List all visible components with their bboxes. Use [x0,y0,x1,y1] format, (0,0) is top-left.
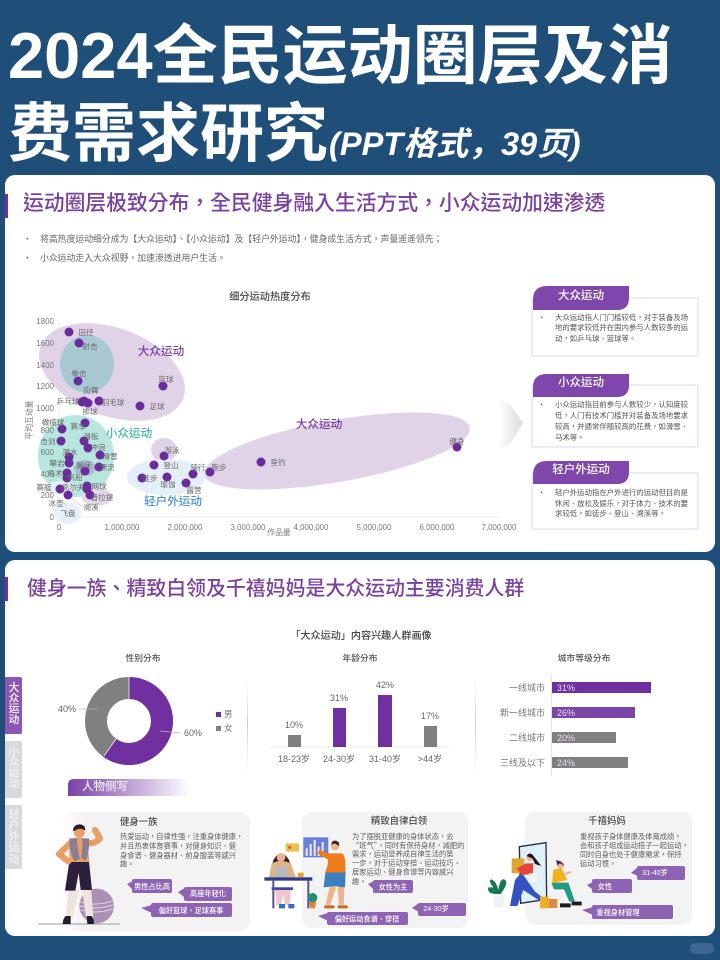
tag [587,879,632,893]
tag: 偏好篮球、足球赛事 [159,906,223,916]
side tab: mass sports: 众 [9,690,20,706]
side tab: light outdoor: 轻 [9,807,20,822]
scatter chart: 平均互动量 [24,400,35,439]
scatter chart: 5,000,000 [357,523,392,532]
side tab: niche sports: 运 [9,765,20,780]
persona card: white collar: 为了摆脱亚健康的身体状态，去 [352,832,454,842]
persona card: millennial moms: 会和孩子组成运动搭子一起运动， [580,841,689,851]
bar chart: city tier: 26% [557,708,575,718]
tag [631,866,685,880]
scatter chart: 瑜伽 [160,479,176,490]
bar chart: age [270,651,453,764]
persona card: white collar [264,812,468,928]
scatter chart: 作品量 [267,527,291,538]
tag [368,880,413,893]
donut chart: gender: 男 [224,708,233,720]
definition card: niche sports [532,374,698,447]
tag: 男性占比高 [134,882,170,892]
definition card: light outdoor: • [538,487,545,498]
side tab: niche sports: 动 [9,776,20,791]
scatter chart: 乒乓球 [57,396,80,407]
scatter chart: 6,000,000 [420,523,455,532]
heading: 健身一族、精致白领及千禧妈妈是大众运动主要消费人群 [27,572,524,601]
bar chart: age: 31% [330,693,348,703]
scatter chart: 1000 [36,404,55,413]
definition card: mass sports: 大众运动指人门门槛较低，对于装备及场 [555,312,688,323]
bar chart: city tier: 31% [557,683,575,693]
scatter chart: 排球 [82,406,98,417]
bar chart: age: >44岁 [418,753,442,764]
scatter chart: 射击 [82,341,98,352]
tag: 女性 [598,882,612,892]
bar chart: city tier: 三线及以下 [500,756,545,769]
bullet text block [23,232,442,264]
tag: 女性为主 [379,882,407,892]
persona card: fitness group: 并且热衷体育赛事，对健身知识、健 [120,842,236,852]
icon: mother and shopping [488,843,582,908]
scatter chart: 田径 [78,327,94,338]
definition card: niche sports: 低，人门有技术门槛并对装备及场地要求 [555,410,689,421]
scatter chart: 普拉提 [91,492,114,503]
scatter chart: 跑步 [211,462,227,473]
section tab: persona [68,778,190,796]
scatter chart: 7,000,000 [482,523,517,532]
bar chart: age: 24-30岁 [323,753,355,764]
side tab: mass sports: 运 [9,701,20,716]
scatter chart: 滑板 [83,431,99,442]
panel: sport circle distribution [5,175,715,552]
definition card: mass sports: • [538,312,545,323]
scatter chart: 2,000,000 [168,523,203,532]
scatter chart: 1,000,000 [105,523,140,532]
scatter chart: 1600 [36,339,55,348]
tag [318,912,408,925]
scatter chart: 滑雪 [102,451,118,462]
donut chart: gender [58,651,233,756]
donut chart: gender: 女 [224,722,233,734]
persona card: white collar: 趣。 [352,877,367,887]
bar chart: city tier: 新一线城市 [500,706,545,719]
side tab: light outdoor: 运 [9,840,20,855]
title: 2024全民运动圈层及消 [8,19,673,92]
chart heading: 「大众运动」内容兴趣人群画像 [290,627,432,642]
bullet text block: 将高热度运动细分成为【大众运动】、【小众运动】及【轻户外运动】，健身成生活方式，声量遥遥领先； [40,232,442,245]
scatter chart: 大众运动 [296,416,342,432]
donut chart: gender: 40% [58,704,76,714]
definition card: niche sports: 小众运动指目前参与人数较少，认知度较 [555,399,689,410]
persona card: fitness group [38,812,250,931]
scatter chart: 橄榄球 [42,417,65,428]
tag [412,903,466,916]
heading accent bar [5,194,8,218]
bullet text block: 小众运动走入大众视野，加速渗透进用户生活。 [40,251,226,264]
persona card: fitness group: 热爱运动，自律性强，注重身体健康， [120,832,243,842]
arrow [498,400,523,450]
persona card: white collar: 一步，对于运动穿搭、运动技巧、 [352,858,461,868]
scatter chart: 4,000,000 [294,523,329,532]
scatter chart: 小众运动 [106,425,152,441]
definition card: niche sports: 小众运动 [558,374,604,390]
tag [141,903,232,917]
side tab: light outdoor [5,805,22,869]
definition card: niche sports: • [538,399,545,410]
tag [178,887,232,901]
bar chart: age: 31-40岁 [369,753,401,764]
persona card: fitness group: 趣。 [120,860,135,870]
bar chart: city tier: 一线城市 [509,681,545,694]
bar chart: city tier: 24% [557,758,575,768]
persona card: millennial moms [488,812,692,925]
definition card: mass sports: 大众运动 [558,287,604,303]
scatter chart: 1400 [36,361,55,370]
scatter chart: 0 [50,513,55,522]
panel: consumer groups [5,560,715,936]
scatter chart: 赛艇 [36,482,52,493]
persona card: millennial moms: 运动习惯。 [580,859,616,869]
bar chart: city tier [500,651,651,776]
side tab: mass sports: 动 [9,712,20,727]
scatter chart: 街舞 [83,385,99,396]
definition card: light outdoor: 轻户外运动 [552,461,610,477]
donut chart: gender: 性别分布 [125,651,161,664]
persona card: millennial moms: 重视孩子身体健康及体育成绩， [580,832,682,842]
tag: 高座年轻化 [190,889,226,899]
scatter chart: 帆船 [67,472,83,483]
scatter chart: 3,000,000 [231,523,266,532]
watermark badge [690,943,714,954]
heading: 运动圈层极致分布，全民健身融入生活方式，小众运动加速渗透 [23,186,606,216]
persona card: millennial moms: 同时自身也处于健康需求，保持 [580,850,682,860]
bar chart: age: 10% [285,720,303,730]
scatter chart: 细分运动热度分布 [229,288,311,303]
tag [127,879,172,893]
definition card: niche sports: 较高，并通常伴随较高的花费，如滑雪、 [555,421,688,432]
definition card: light outdoor [532,461,698,529]
scatter chart: 攀岩 [49,458,65,469]
tag: 重视身材管理 [596,908,640,918]
scatter chart: 200 [41,491,55,500]
scatter chart: 蹦床 [76,460,92,471]
persona card: white collar: 精致自律白领 [371,813,428,827]
scatter chart: 高尔夫 [62,482,85,493]
scatter chart: 拳击 [71,368,87,379]
definition card: light outdoor: 求较低，如徒步、登山、溯溪等。 [555,508,666,519]
scatter chart: 0 [57,523,62,532]
side tab: light outdoor: 户 [9,818,19,833]
definition card: mass sports: 动，如乒乓球、篮球等。 [555,333,636,344]
bar chart: age: 42% [376,680,394,690]
bar chart: age: 年龄分布 [342,651,378,664]
scatter chart: 网球 [91,481,107,492]
scatter chart: 冲浪 [90,442,106,453]
scatter chart: 赛车 [70,421,86,432]
scatter chart: 漂流 [99,462,115,473]
tag: 31-40岁 [642,868,668,877]
persona card: fitness group: 健身一族 [120,814,158,828]
scatter chart: 足球 [149,401,165,412]
side tab: niche sports: 众 [9,754,20,770]
scatter chart: 篮球 [158,374,174,385]
scatter chart: 800 [41,426,55,435]
bar chart: age: 18-23岁 [278,753,310,764]
scatter chart: 轻户外运动 [144,493,202,509]
scatter chart: 1200 [36,382,55,391]
side tab: niche sports: 小 [9,744,20,759]
scatter chart: 羽毛球 [102,397,125,408]
scatter chart: 登山 [163,460,179,471]
section tab: persona: 人物侧写 [82,778,128,794]
side tab: mass sports [5,677,22,734]
persona card: fitness group: 身食谱、健身器材、前身服装等感兴 [120,851,236,861]
scatter chart [24,288,517,538]
scatter chart: 大众运动 [138,343,184,359]
definition card: mass sports [532,286,698,356]
tag: 偏好运动食谱、穿搭 [335,914,399,924]
scatter chart: 垂钓 [270,457,286,468]
tag [582,905,673,919]
side tab: mass sports: 大 [9,680,20,695]
bar chart: city tier: 城市等级分布 [558,651,611,664]
title: 费需求研究 [8,98,328,170]
title [8,19,673,170]
definition card: light outdoor: 休闲、放松及娱乐，对于体力、技术的要 [555,498,688,509]
scatter chart: 600 [41,448,55,457]
scatter chart: 马术 [47,468,63,479]
bar chart: city tier: 20% [557,733,575,743]
scatter chart: 徒步 [142,473,158,484]
scatter chart: 飞盘 [60,508,76,519]
persona card: white collar: 需求，运动是养成自律生活的第 [352,850,454,860]
bullet text block: • [23,232,32,245]
heading accent bar [5,577,8,601]
scatter chart: 400 [41,470,55,479]
scatter chart: 1800 [36,317,55,326]
scatter chart: 冰壶 [48,498,64,509]
bullet text block: • [23,251,32,264]
tag: 24-30岁 [423,904,449,913]
definition card: niche sports: 马术等。 [555,432,585,443]
bar chart: age: 17% [421,711,439,721]
scatter chart: 健身 [449,436,465,447]
side tab: light outdoor: 外 [9,829,20,844]
donut chart: gender: 60% [184,728,202,738]
scatter chart: 溯溪 [83,502,99,513]
icon: athlete [38,824,120,924]
persona card: white collar: 居家运动、健身食谱等内容感兴 [352,868,454,878]
side tab: light outdoor: 动 [9,852,20,867]
definition card: mass sports: 地的要求较低并在国内参与人数较多的运 [555,322,689,333]
scatter chart: 击剑 [40,436,56,447]
persona card: millennial moms: 千禧妈妈 [588,813,626,827]
side tab: niche sports [5,741,22,798]
scatter chart: 潜水 [62,447,78,458]
persona card: white collar: “班气”，同时有保持身材，减肥的 [352,841,464,851]
scatter chart: 游泳 [164,445,180,456]
subtitle: format note: (PPT格式，39页) [329,125,581,162]
icon: office workers [264,837,348,908]
scatter chart: 骑行 [190,462,206,473]
definition card: light outdoor: 轻户外运动指在户外进行的运动但目的是 [555,487,689,498]
scatter chart: 露营 [186,485,202,496]
bar chart: city tier: 二线城市 [509,731,545,744]
